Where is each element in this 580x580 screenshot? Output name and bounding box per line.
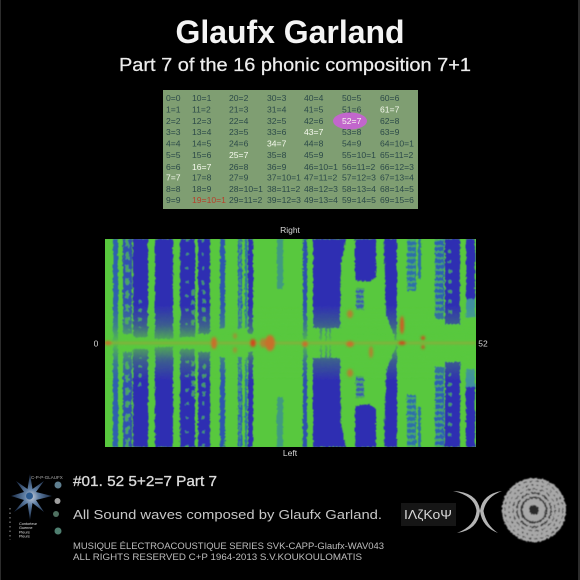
column 4: 33=6 [267, 127, 287, 137]
column 4: 36=9 [267, 162, 287, 172]
column 3: 22=4 [229, 116, 249, 126]
column 5: 40=4 [304, 93, 324, 103]
logo caption bottom: Pleurs [19, 535, 30, 539]
highlight: pink ellipse around 52=7 [333, 112, 367, 130]
number table panel [163, 90, 418, 209]
column 1: 8=8 [166, 184, 181, 194]
column 1: 0=0 [166, 93, 181, 103]
label: Left: Left [283, 448, 298, 458]
column 1: 6=6 [166, 162, 181, 172]
column 2: 19=10=1 [192, 195, 226, 205]
column 1: 3=3 [166, 127, 181, 137]
column 6: 55=10=1 [342, 150, 376, 160]
column 5: 49=13=4 [304, 195, 338, 205]
column 7: 65=11=2 [380, 150, 414, 160]
column 7: 68=14=5 [380, 184, 414, 194]
column 3: 25=7 [229, 150, 249, 160]
logo caption bottom: Pleurs [19, 530, 30, 534]
column 4: 39=12=3 [267, 195, 301, 205]
logo caption bottom: Contorteur [19, 522, 38, 526]
column 4: 30=3 [267, 93, 287, 103]
label: 0: 0 [94, 338, 99, 348]
series line: MUSIQUE ÉLECTROACOUSTIQUE SERIES SVK-CAPP-Glaufx-WAV043 [73, 541, 384, 552]
column 2: 16=7 [192, 162, 212, 172]
column 6: 57=12=3 [342, 172, 376, 182]
credit line: All Sound waves composed by Glaufx Garland. [73, 507, 382, 522]
column 3: 29=11=2 [229, 195, 263, 205]
column 2: 14=5 [192, 138, 212, 148]
column 7: 61=7 [380, 104, 400, 114]
column 5: 45=9 [304, 150, 324, 160]
column 7 [380, 93, 414, 205]
column 6: 50=5 [342, 93, 362, 103]
column 1: 2=2 [166, 116, 181, 126]
column 6: 52=7 [342, 116, 362, 126]
column 7: 69=15=6 [380, 195, 414, 205]
column 3: 23=5 [229, 127, 249, 137]
column 3: 24=6 [229, 138, 249, 148]
column 3: 21=3 [229, 104, 249, 114]
column 7: 63=9 [380, 127, 400, 137]
spectrogram centre line hot spots [104, 310, 476, 377]
column 1: 9=9 [166, 195, 181, 205]
column 6: 53=8 [342, 127, 362, 137]
column 5: 46=10=1 [304, 162, 338, 172]
column 1: 5=5 [166, 150, 181, 160]
column 2 [192, 93, 226, 205]
column 2: 17=8 [192, 172, 212, 182]
title: Glaufx Garland [176, 14, 404, 50]
label: 52: 52 [478, 338, 488, 348]
column 6: 51=6 [342, 104, 362, 114]
logo: crescent pair [453, 491, 502, 533]
logo: signature glyph box: ΙΛζΚοΨ [404, 507, 452, 522]
column 5: 48=12=3 [304, 184, 338, 194]
column 1 [166, 93, 181, 205]
column 7: 62=8 [380, 116, 400, 126]
column 2: 15=6 [192, 150, 212, 160]
column 4: 31=4 [267, 104, 287, 114]
column 4: 34=7 [267, 138, 287, 148]
column 4: 32=5 [267, 116, 287, 126]
column 2: 12=3 [192, 116, 212, 126]
column 4: 35=8 [267, 150, 287, 160]
column 7: 64=10=1 [380, 138, 414, 148]
column 3: 26=8 [229, 162, 249, 172]
column 3 [229, 93, 263, 205]
logo caption bottom: Guenne [19, 526, 33, 530]
column 5: 43=7 [304, 127, 324, 137]
column 3: 20=2 [229, 93, 249, 103]
column 7: 60=6 [380, 93, 400, 103]
column 5: 41=5 [304, 104, 324, 114]
column 6: 54=9 [342, 138, 362, 148]
column 6: 59=14=5 [342, 195, 376, 205]
column 2: 18=9 [192, 184, 212, 194]
logo: signature glyph box [401, 503, 456, 526]
column 5: 42=6 [304, 116, 324, 126]
column 3: 28=10=1 [229, 184, 263, 194]
small emblems [53, 482, 62, 534]
logo: star emblem [10, 474, 63, 540]
column 7: 66=12=3 [380, 162, 414, 172]
subtitle: Part 7 of the 16 phonic composition 7+1 [119, 55, 471, 75]
column 4: 37=10=1 [267, 172, 301, 182]
column 2: 10=1 [192, 93, 212, 103]
column 6: 58=13=4 [342, 184, 376, 194]
column 5: 44=8 [304, 138, 324, 148]
track heading: #01. 52 5+2=7 Part 7 [73, 473, 217, 490]
column 4: 38=11=2 [267, 184, 301, 194]
column 5: 47=11=2 [304, 172, 338, 182]
logo caption top: C-P-P-GLAUFX [31, 475, 63, 480]
column 6 [342, 93, 376, 205]
column 5 [304, 93, 338, 205]
logo: textured spiral disc [502, 478, 566, 542]
spectrogram chart [105, 239, 476, 447]
rights line: ALL RIGHTS RESERVED C+P 1964-2013 S.V.KOUKOULOMATIS [73, 552, 362, 563]
column 2: 11=2 [192, 104, 211, 114]
column 7: 67=13=4 [380, 172, 414, 182]
column 1: 7=7 [166, 172, 181, 182]
column 6: 56=11=2 [342, 162, 376, 172]
column 3: 27=9 [229, 172, 249, 182]
column 1: 1=1 [166, 104, 181, 114]
label: Right: Right [280, 225, 301, 235]
column 2: 13=4 [192, 127, 212, 137]
column 4 [267, 93, 301, 205]
column 1: 4=4 [166, 138, 181, 148]
